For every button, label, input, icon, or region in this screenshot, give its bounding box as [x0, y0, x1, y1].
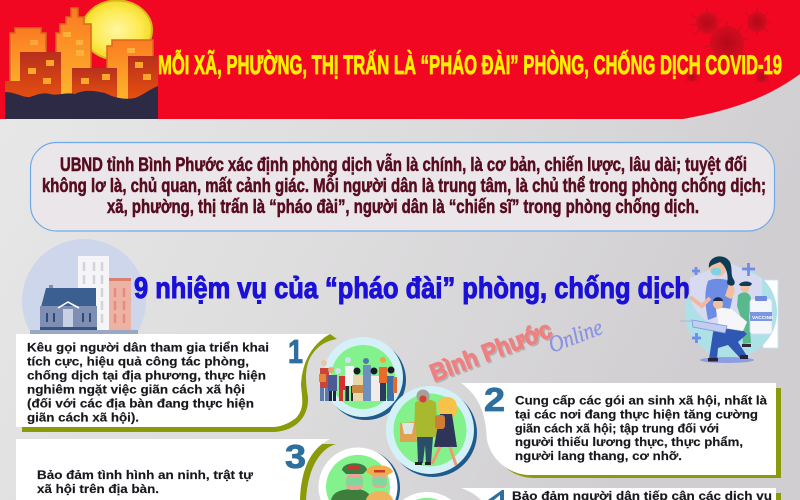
panel: task 4	[461, 488, 781, 500]
text: task 3	[37, 468, 253, 496]
number 4	[488, 490, 504, 500]
text: task 1: (đối với các địa bàn đang thực hiện	[27, 396, 254, 410]
text: task 1	[27, 340, 269, 424]
panel: task 1	[16, 333, 337, 432]
illustration: vaccination team	[680, 256, 778, 363]
watermark: Binh Phuoc Online: Bình Phước	[428, 317, 557, 389]
text: task 1: chống dịch tại địa phương, thực hiện	[27, 368, 266, 382]
illustration: vaccination team: VACCINE	[752, 315, 774, 321]
header banner	[0, 0, 800, 119]
icon: city skyline with sun	[5, 0, 158, 119]
text: task 1: tích cực, hiệu quả công tác phòng,	[27, 354, 249, 368]
text: task 2: người thiếu lương thực, thực phẩm,	[515, 435, 743, 449]
panel: task 3	[16, 438, 336, 500]
icon: service access circle	[403, 492, 451, 500]
icon: security officers circle	[318, 448, 400, 500]
watermark: Binh Phuoc Online: Online	[545, 314, 606, 358]
text: task 2: người lang thang, cơ nhỡ.	[515, 449, 682, 463]
text: task 3: xã hội trên địa bàn.	[37, 482, 159, 496]
watermark: Binh Phuoc Online: Bình Phước	[426, 316, 556, 388]
number 2: 2	[484, 381, 505, 418]
text: task 1: Kêu gọi người dân tham gia triển khai	[27, 340, 269, 354]
icon: houses in circle	[22, 239, 146, 334]
icon: coronavirus cluster	[685, 7, 771, 84]
text: task 1: giãn cách xã hội).	[27, 410, 139, 424]
icon: citizens circle	[319, 337, 406, 420]
text: task 2: giãn cách xã hội; tập trung đối với	[515, 421, 719, 435]
number 3: 3	[285, 438, 306, 475]
text: task 2: Cung cấp các gói an sinh xã hội, nhất là	[515, 393, 767, 407]
text: task 1: nghiêm ngặt việc giãn cách xã hội	[27, 382, 245, 396]
panel: task 2	[461, 381, 781, 478]
heading: nine tasks: 9 nhiệm vụ của “pháo đài” phòng, chống dịch	[134, 272, 690, 305]
number 1: 1	[288, 333, 303, 370]
panel: intro summary	[30, 142, 774, 231]
text: task 2	[515, 393, 767, 463]
text: task 2: tại các nơi đang thực hiện tăng cường	[515, 407, 758, 421]
text: task 3: Bảo đảm tình hình an ninh, trật tự	[37, 468, 253, 482]
icon: aid recipients circle	[386, 386, 477, 477]
